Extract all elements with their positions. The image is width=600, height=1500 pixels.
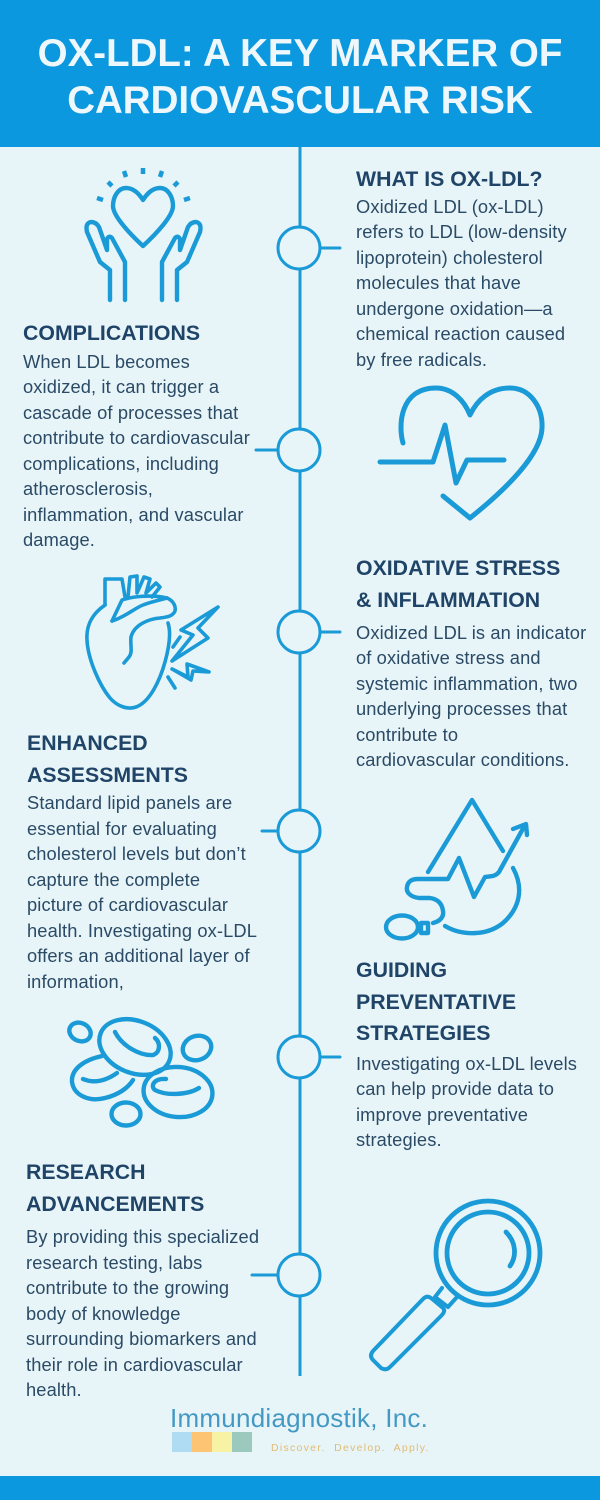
section: enhanced assessments	[27, 731, 257, 992]
title: OX-LDL: A KEY MARKER OF	[38, 32, 562, 75]
body text: Standard lipid panels are	[27, 792, 232, 813]
section: research advancements	[26, 1160, 259, 1400]
timeline	[252, 147, 340, 1376]
body text	[27, 792, 257, 992]
timeline node 3	[278, 611, 340, 653]
section: complications	[23, 321, 250, 550]
body text: Oxidized LDL is an indicator	[356, 622, 586, 643]
logo wordmark: Immundiagnostik, Inc.	[170, 1403, 428, 1433]
heading: PREVENTATIVE	[356, 990, 516, 1014]
timeline node 5	[278, 1036, 340, 1078]
icon: blood pressure drop with arrow	[386, 800, 527, 938]
body text: cardiovascular conditions.	[356, 749, 569, 770]
logo	[170, 1403, 430, 1454]
body text: chemical reaction caused	[356, 323, 565, 344]
body text: contribute to the growing	[26, 1277, 229, 1298]
heading	[26, 1160, 204, 1216]
timeline node 4	[262, 810, 320, 852]
icon: hands holding heart	[86, 168, 200, 300]
body text: molecules that have	[356, 272, 521, 293]
heading	[27, 731, 188, 786]
body text: contribute to	[356, 724, 458, 745]
timeline node 1	[278, 227, 340, 269]
body text: damage.	[23, 529, 95, 550]
body text: refers to LDL (low-density	[356, 221, 567, 242]
body text: inflammation, and vascular	[23, 504, 244, 525]
body text: by free radicals.	[356, 349, 487, 370]
body text	[356, 1052, 577, 1150]
icon: heart with pulse line	[380, 388, 542, 518]
body text	[23, 350, 250, 550]
body text: cholesterol levels but don’t	[27, 843, 246, 864]
body text: cascade of processes that	[23, 402, 238, 423]
title: CARDIOVASCULAR RISK	[67, 79, 533, 122]
footer band	[0, 1476, 600, 1500]
body text: systemic inflammation, two	[356, 673, 578, 694]
heading: COMPLICATIONS	[23, 321, 200, 345]
body text: essential for evaluating	[27, 818, 217, 839]
body text: can help provide data to	[356, 1078, 554, 1099]
body text: complications, including	[23, 453, 219, 474]
body text: information,	[27, 971, 124, 992]
body text	[356, 622, 586, 770]
body text: offers an additional layer of	[27, 945, 250, 966]
body text: Oxidized LDL (ox-LDL)	[356, 196, 544, 216]
heading	[356, 556, 560, 612]
heading: OXIDATIVE STRESS	[356, 556, 560, 580]
heading: ASSESSMENTS	[27, 762, 188, 786]
body text: strategies.	[356, 1129, 442, 1150]
heading: GUIDING	[356, 958, 447, 982]
body text: atherosclerosis,	[23, 478, 153, 499]
body text: health.	[26, 1379, 82, 1400]
section: what is ox-ldl	[356, 167, 567, 370]
heading: STRATEGIES	[356, 1021, 490, 1045]
body text: Investigating ox-LDL levels	[356, 1052, 577, 1074]
body text: underlying processes that	[356, 698, 567, 719]
body text: research testing, labs	[26, 1252, 202, 1273]
heading: & INFLAMMATION	[356, 588, 540, 612]
body text: contribute to cardiovascular	[23, 427, 250, 448]
heading: RESEARCH	[26, 1160, 146, 1184]
icon: blood cells	[66, 1009, 215, 1126]
body text: undergone oxidation—a	[356, 298, 553, 319]
section: guiding preventative strategies	[356, 958, 577, 1150]
tagline: Discover. Develop. Apply.	[271, 1442, 430, 1454]
title	[38, 32, 562, 122]
body text: When LDL becomes	[23, 350, 190, 372]
icon: magnifying glass	[371, 1201, 540, 1369]
body text	[26, 1226, 259, 1400]
body text: surrounding biomarkers and	[26, 1328, 257, 1349]
icon: anatomical heart with lightning	[87, 576, 218, 708]
heading: ADVANCEMENTS	[26, 1192, 204, 1216]
logo colour squares	[172, 1432, 252, 1452]
header banner	[0, 0, 600, 147]
timeline node 2	[256, 429, 320, 471]
body text: improve preventative	[356, 1104, 528, 1125]
body text: picture of cardiovascular	[27, 894, 228, 915]
body text: their role in cardiovascular	[26, 1354, 243, 1375]
body text: capture the complete	[27, 869, 200, 890]
body text	[356, 196, 567, 370]
body text: By providing this specialized	[26, 1226, 259, 1247]
body text: lipoprotein) cholesterol	[356, 247, 543, 268]
body text: body of knowledge	[26, 1303, 180, 1324]
heading: WHAT IS OX-LDL?	[356, 167, 543, 191]
heading	[356, 958, 516, 1045]
section: oxidative stress	[356, 556, 586, 770]
timeline node 6	[252, 1254, 320, 1296]
body text: of oxidative stress and	[356, 647, 541, 668]
body text: oxidized, it can trigger a	[23, 376, 219, 397]
body text: health. Investigating ox-LDL	[27, 920, 257, 941]
heading: ENHANCED	[27, 731, 148, 755]
